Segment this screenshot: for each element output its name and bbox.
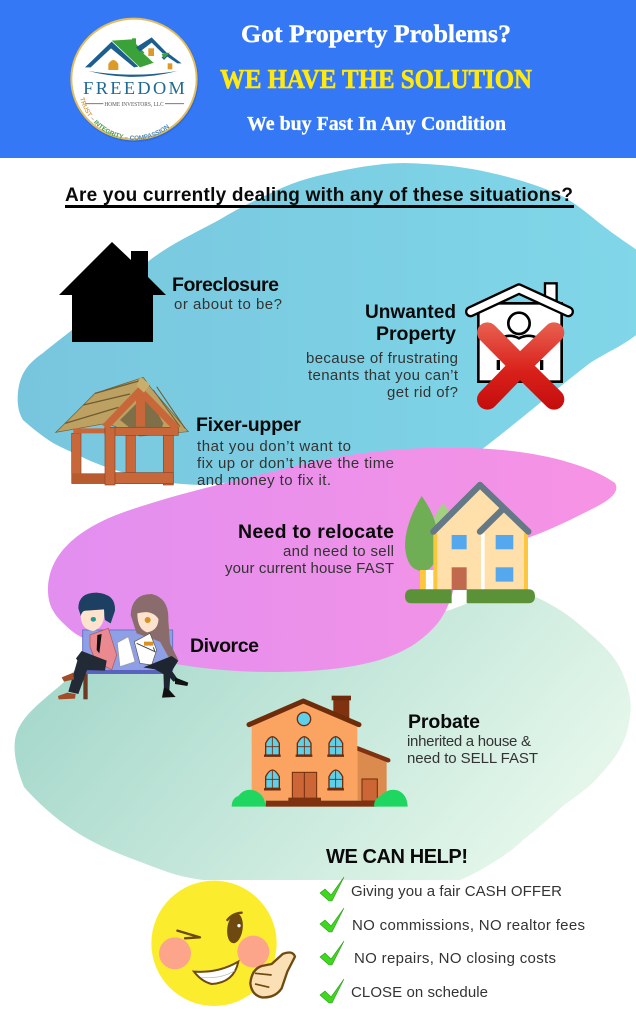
relocate label xyxy=(225,521,394,577)
unwanted property label: get rid of? xyxy=(387,384,458,401)
divorce label: Divorce xyxy=(190,635,259,657)
section heading: Are you currently dealing with any of these situations? xyxy=(65,185,573,206)
icon: yellow house with trees xyxy=(405,485,535,603)
blue background blob xyxy=(18,163,636,485)
green background blob xyxy=(15,593,631,880)
icon: orange two-story house xyxy=(232,696,408,807)
logo badge: TRUST – INTEGRITY – COMPASSION xyxy=(80,97,170,140)
relocate label: your current house FAST xyxy=(225,560,394,577)
probate label: Probate xyxy=(408,711,480,733)
unwanted property label: Property xyxy=(376,323,456,345)
fixer-upper label: and money to fix it. xyxy=(197,472,331,489)
foreclosure label: Foreclosure xyxy=(172,274,279,296)
icon: crossed out house xyxy=(471,283,568,399)
unwanted property label: tenants that you can’t xyxy=(308,367,459,384)
benefit: no commissions xyxy=(320,908,585,934)
header headline 2: WE HAVE THE SOLUTION xyxy=(220,64,532,94)
icon: couple on bench xyxy=(58,593,188,699)
benefit: no commissions: NO commissions, NO realtor fees xyxy=(352,917,585,934)
logo badge: FREEDOM xyxy=(83,78,185,98)
relocate label: and need to sell xyxy=(283,543,394,560)
unwanted property label: Unwanted xyxy=(365,301,456,323)
probate label xyxy=(407,711,538,767)
we can help heading: WE CAN HELP! xyxy=(326,846,468,868)
fixer-upper label: Fixer-upper xyxy=(196,414,301,436)
pink background blob xyxy=(48,448,616,672)
foreclosure label xyxy=(172,274,282,313)
probate label: inherited a house & xyxy=(407,733,531,750)
header headline 1: Got Property Problems? xyxy=(241,21,511,48)
fixer-upper label xyxy=(196,414,394,489)
benefit: no repairs xyxy=(320,941,556,967)
benefit: close on schedule xyxy=(320,979,488,1003)
probate label: need to SELL FAST xyxy=(407,750,538,767)
logo badge xyxy=(70,18,199,142)
unwanted property label: because of frustrating xyxy=(306,350,458,367)
benefit: fair cash offer xyxy=(320,877,562,901)
header band xyxy=(0,0,636,158)
icon: wooden frame shelter xyxy=(56,377,188,485)
icon: black house xyxy=(59,242,166,342)
benefit: no repairs: NO repairs, NO closing costs xyxy=(354,950,556,967)
benefit: close on schedule: CLOSE on schedule xyxy=(351,984,488,1001)
fixer-upper label: fix up or don’t have the time xyxy=(197,455,394,472)
header headline 3: We buy Fast In Any Condition xyxy=(247,114,506,135)
icon: winking smiley with thumbs up xyxy=(151,881,295,1006)
fixer-upper label: that you don’t want to xyxy=(197,438,351,455)
benefit: fair cash offer: Giving you a fair CASH OFFER xyxy=(351,883,562,900)
relocate label: Need to relocate xyxy=(238,521,394,543)
foreclosure label: or about to be? xyxy=(174,296,282,313)
unwanted property label xyxy=(306,301,459,401)
logo badge: HOME INVESTORS, LLC xyxy=(104,101,164,108)
